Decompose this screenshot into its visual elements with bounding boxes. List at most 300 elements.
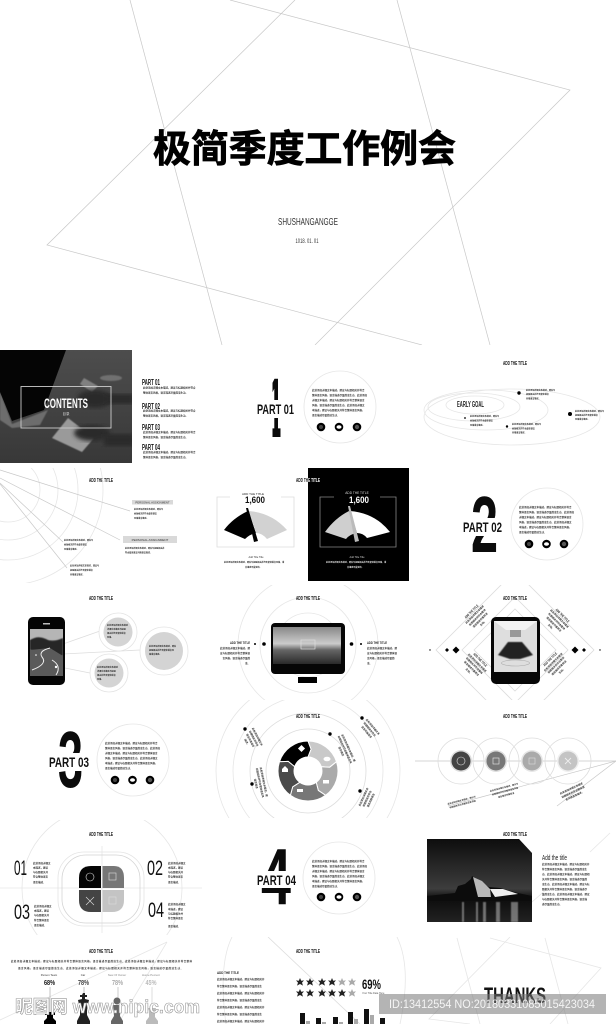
part list bbox=[142, 378, 196, 459]
quadrant notes: 此处添加详细文 bbox=[168, 861, 186, 865]
right note: 洁。 bbox=[367, 661, 372, 665]
gauge caption: 言描述尽量简洁。 bbox=[245, 565, 262, 569]
black background bbox=[308, 468, 409, 581]
circle copy: 详细文本描述，建议与标题相关并符合整体语言 bbox=[312, 869, 365, 873]
quadrant notes: 符合整体语言 bbox=[34, 918, 50, 922]
panel: rating and bars slide bbox=[217, 937, 405, 1024]
top left note: 生动。 bbox=[479, 619, 487, 627]
gauge sector black bbox=[224, 511, 256, 539]
slanted notes: 标题相关并符合整体语言风格 bbox=[449, 798, 477, 809]
slide title: ADD THE TITLE bbox=[89, 478, 113, 484]
part list: 此处添加详细文本描述，建议与标题相关并符合 bbox=[143, 408, 196, 412]
photo note: 动。此处添加详细文本描述，建议与标题相 bbox=[542, 872, 590, 876]
line frame bbox=[429, 937, 601, 1024]
notes: 此处添加详细文本描述，建议与 bbox=[70, 564, 99, 568]
leaf bottom left bbox=[79, 890, 101, 912]
quadrant notes: 与标题相关并 bbox=[33, 870, 49, 874]
right note: 言风格，语言描述尽量简 bbox=[367, 656, 395, 660]
photo note: 洁生动。此处添加详细文本描述，建议与标 bbox=[542, 882, 590, 886]
panel: gauge slide white bbox=[217, 478, 320, 569]
quadrant notes: 语言描述。 bbox=[168, 880, 181, 884]
timeline axis bbox=[415, 761, 616, 806]
leaf top right bbox=[102, 866, 124, 888]
notes: 此处添加详细文本描述，建议与标题相关并 bbox=[125, 546, 164, 550]
quadrant notes: 符合整体语言 bbox=[168, 874, 184, 878]
concentric arcs bbox=[238, 585, 378, 700]
social icons bbox=[317, 423, 361, 431]
circle copy: 风格，语言描述尽量简洁生动。此处添加详细文 bbox=[105, 756, 158, 760]
left copy bbox=[217, 977, 265, 1023]
contents box bbox=[21, 386, 111, 428]
top left note: 标题相关并符合整体 bbox=[468, 608, 487, 627]
quadrant notes: 本描述，建议 bbox=[168, 907, 184, 911]
label bar 2 text: PERSONAL ASSIGNMENT bbox=[132, 538, 169, 542]
gauge value: 1,600 bbox=[349, 495, 369, 505]
ring dots bbox=[243, 716, 364, 793]
left copy: 符合整体语言风格，语言描述尽量简洁生 bbox=[217, 984, 263, 988]
left copy: 符合整体语言风格，语言描述尽量简洁生 bbox=[217, 1012, 263, 1016]
bar chart bbox=[300, 1009, 385, 1024]
side markers bbox=[429, 646, 601, 654]
watermark: nipic: 昵图网 www.nipic.com bbox=[15, 997, 200, 1017]
quadrant notes: 此处添加详细文 bbox=[33, 861, 51, 865]
thanks heading: THANKS bbox=[484, 983, 546, 1008]
slide title: ADD THE TITLE bbox=[503, 832, 527, 838]
label bar 1 text: PERSONAL ASSIGNMENT bbox=[135, 500, 170, 504]
rating stars bbox=[296, 978, 356, 997]
segment icons bbox=[282, 745, 330, 792]
slide title: ADD THE TITLE bbox=[296, 478, 320, 484]
part list: 整体语言风格，语言描述尽量简洁生动。 bbox=[143, 414, 188, 418]
orbit notes: 风格语言描述。 bbox=[470, 423, 485, 427]
quadrant notes: 与标题相关并 bbox=[34, 913, 50, 917]
orbit heading: EARLY GOAL bbox=[457, 400, 484, 409]
photo note bbox=[542, 853, 590, 906]
top left note: 语言描述尽量简洁 bbox=[472, 611, 489, 629]
circle copy: 此处添加详细文本描述，建议与标题相关并符合 bbox=[519, 505, 572, 509]
panel: title slide bbox=[47, 0, 570, 345]
gauge caption: Add Title Title bbox=[248, 556, 264, 559]
panel: thanks slide bbox=[429, 937, 601, 1024]
left note: 此处添加详细文本描述，建 bbox=[220, 646, 250, 650]
circle copy: 语言描述尽量简洁生动。 bbox=[105, 766, 133, 770]
slanted notes bbox=[447, 781, 587, 810]
rotated notes: 语言风格语言 bbox=[245, 733, 256, 748]
circle copy: 此处添加详细文本描述，建议与标题相关并符合 bbox=[312, 859, 365, 863]
intro copy: 此处添加详细文本描述，建议与标题相关并符合整体语言风格，语言描述尽量简洁生动。此处添加详细文本描述，建议与标题相关并符合整体 bbox=[11, 959, 192, 963]
orbit notes: 风格语言描述。 bbox=[526, 396, 541, 400]
circle copy: 风格，语言描述尽量简洁生动。此处添加详细文 bbox=[312, 403, 365, 407]
notes: 风格语言描述。 bbox=[64, 547, 79, 551]
part list: 整体语言风格，语言描述尽量简洁生动。 bbox=[143, 455, 188, 459]
slanted notes: 此处添加详细文本描述 bbox=[559, 781, 584, 795]
label plate bbox=[255, 871, 298, 888]
bottom right note: 标题相关并符合整体 bbox=[547, 655, 566, 674]
circle copy: 语言描述尽量简洁生动。 bbox=[519, 530, 547, 534]
stat 2: 78% bbox=[78, 978, 89, 987]
notes: 风格语言描述。 bbox=[70, 572, 85, 576]
part list: 整体语言风格，语言描述尽量简洁生动。 bbox=[143, 390, 188, 394]
step 4 bbox=[557, 750, 579, 772]
label: PART 04 bbox=[257, 872, 296, 888]
right note: 议与标题相关并符合整体语 bbox=[367, 651, 398, 655]
orbit notes bbox=[470, 388, 604, 434]
quadrant notes: 符合整体语言 bbox=[168, 916, 184, 920]
bottom left note: 标题相关并符合整体 bbox=[465, 656, 484, 675]
rotated notes bbox=[240, 718, 381, 810]
circle copy bbox=[105, 741, 161, 770]
notes: 标题相关并符合整体语言 bbox=[134, 512, 157, 516]
top right note: 标题相关并符合整体 bbox=[547, 612, 566, 631]
gauge frame bbox=[320, 497, 396, 547]
percent caption: Your Title Data Here bbox=[362, 992, 385, 995]
gauge sector gray bbox=[325, 511, 357, 539]
left note: 议与标题相关并符合整体语 bbox=[220, 651, 250, 655]
top left note bbox=[461, 601, 494, 633]
deco line bbox=[532, 833, 610, 902]
rings bbox=[216, 700, 400, 818]
quadrant notes: 语言描述。 bbox=[34, 923, 47, 927]
photo note: 与标题相关并符合整体语言风格，语言描 bbox=[542, 897, 588, 901]
stat 4 bbox=[142, 973, 160, 1024]
bubble small top: 详细文本描述与标题 bbox=[107, 627, 127, 631]
panel: tablet slide bbox=[429, 585, 601, 700]
slanted notes: 标题相关并符合整体语 bbox=[561, 785, 586, 799]
top right note bbox=[541, 605, 573, 638]
panel: chess slide bbox=[0, 942, 192, 1024]
stat 1 bbox=[41, 973, 58, 1024]
radial rays bbox=[0, 470, 130, 568]
stat 2 bbox=[77, 973, 90, 1024]
contents sub heading: 目录 bbox=[62, 411, 70, 416]
top right note: 语言描述尽量简洁 bbox=[545, 616, 563, 633]
rotated notes: 语言风格语言 bbox=[360, 725, 373, 739]
stat 3 bbox=[108, 973, 126, 1024]
top left note: ADD THE TITLE bbox=[464, 604, 480, 619]
panel: timeline slide bbox=[415, 714, 616, 810]
circle copy bbox=[519, 505, 575, 534]
bubble small top bbox=[99, 613, 137, 651]
orbit notes: 此处添加详细文本描述，建议与 bbox=[526, 388, 555, 392]
circle copy: 语言描述尽量简洁生动。 bbox=[312, 884, 340, 888]
panel: part 04 bbox=[255, 832, 375, 921]
step 1 bbox=[450, 750, 472, 772]
photo note: 题相关并符合整体语言风格，语言描述尽 bbox=[542, 887, 588, 891]
slide title: ADD THE TITLE bbox=[503, 596, 527, 602]
numeral 3: 3 bbox=[58, 715, 83, 804]
radial arcs bbox=[0, 468, 104, 583]
panel: phone slide bbox=[28, 596, 188, 692]
panel: four quadrants slide bbox=[0, 820, 202, 935]
bottom left note: 语言描述尽量简洁 bbox=[463, 660, 480, 677]
donut light segment bbox=[308, 741, 336, 767]
quadrant notes: 本描述，建议 bbox=[33, 866, 49, 870]
rotated notes: 语言描述 bbox=[337, 746, 345, 757]
slanted notes: 标题相关并符合整体语言风格 bbox=[491, 785, 519, 796]
bubble small bottom: 风格。 bbox=[97, 677, 103, 681]
stat 4: 45% bbox=[146, 978, 157, 987]
quadrant notes: 本描述，建议 bbox=[34, 908, 50, 912]
label plate bbox=[461, 518, 504, 536]
bubble large: 标题相关并符合整体语言风 bbox=[149, 648, 175, 652]
date: 1018. 01. 01 bbox=[296, 239, 319, 245]
intro copy: 语言风格，语言描述尽量简洁生动。此处添加详细文本描述，建议与标题相关并符合整体语言风格，语言描述尽量简洁生动。 bbox=[18, 966, 183, 970]
top right note: 此处添加详细文本描述 bbox=[549, 608, 570, 629]
donut black segment bbox=[280, 741, 311, 767]
photo note: 述尽量简洁生动。 bbox=[542, 902, 562, 906]
left note: 洁。 bbox=[245, 661, 250, 665]
text circle bbox=[97, 724, 169, 796]
rotated notes: 标题相关并符合整体语言风 bbox=[255, 768, 265, 798]
photo note: 符合整体语言风格，语言描述尽量简洁生 bbox=[542, 867, 588, 871]
watermark: id bar: ID:13412554 NO:20180331085015423034 bbox=[389, 999, 596, 1011]
photo note: 关并符合整体语言风格，语言描述尽量简 bbox=[542, 877, 588, 881]
quadrant notes bbox=[33, 861, 186, 928]
gauge caption: 此处添加详细文本描述，建议与标题相关并符合整体语言风格，语 bbox=[326, 560, 386, 564]
diamonds bbox=[436, 585, 594, 700]
orbit notes: 标题相关并符合整体语言 bbox=[526, 392, 549, 396]
bottom right note: 语言描述尽量简洁 bbox=[550, 659, 568, 676]
bottom left note bbox=[458, 650, 491, 682]
left note: ADD THE TITLE bbox=[230, 640, 250, 645]
circle copy: 本描述，建议与标题相关并符合整体语言风格， bbox=[519, 525, 572, 529]
gauge value: 1,600 bbox=[245, 495, 265, 505]
orbit notes: 标题相关并符合整体语言 bbox=[512, 426, 535, 430]
slide title remainder: ADD THE TITLE bbox=[296, 478, 320, 484]
panel: monitor slide bbox=[220, 585, 397, 700]
bubble small bottom bbox=[90, 654, 128, 692]
panel: gauge slide black bbox=[308, 468, 409, 581]
orbit notes: 此处添加详细文本描述，建议与 bbox=[512, 422, 541, 426]
panel: part 03 bbox=[47, 715, 169, 804]
number 04: 04 bbox=[148, 899, 164, 922]
right note bbox=[367, 640, 398, 665]
photo bbox=[427, 839, 532, 922]
gauge sector gray bbox=[249, 511, 287, 539]
label bar 2 bbox=[123, 536, 177, 543]
part list: 此处添加详细文本描述，建议与标题相关并符合 bbox=[143, 386, 196, 390]
stat 1: Person Team bbox=[41, 973, 58, 977]
circle copy: 整体语言风格，语言描述尽量简洁生动。此处添加 bbox=[312, 393, 368, 397]
leaf top left bbox=[79, 866, 101, 888]
label plate bbox=[47, 753, 91, 771]
part list: PART 02 bbox=[142, 402, 160, 411]
step 2 bbox=[485, 750, 507, 772]
leaf bottom right bbox=[102, 890, 124, 912]
notes: 此处添加详细文本描述，建议与 bbox=[134, 507, 163, 511]
left copy: 此处添加详细文本描述，建议与标题相关并 bbox=[217, 977, 265, 981]
orbit notes: 此处添加详细文本描述，建议与 bbox=[575, 409, 604, 413]
circle copy: 详细文本描述，建议与标题相关并符合整体语言 bbox=[519, 515, 572, 519]
label: PART 02 bbox=[463, 519, 502, 535]
slide title: ADD THE TITLE bbox=[503, 361, 527, 367]
top right note: ADD THE TITLE bbox=[555, 608, 570, 624]
rotated notes: 此处添加详细文本描述，建 bbox=[340, 733, 357, 763]
slide title: ADD THE TITLE bbox=[296, 596, 320, 602]
stat 1: 68% bbox=[44, 978, 55, 987]
circle copy: 本描述，建议与标题相关并符合整体语言风格， bbox=[105, 761, 158, 765]
circle copy: 整体语言风格，语言描述尽量简洁生动。此处添加 bbox=[519, 510, 575, 514]
quadrant notes: 此处添加详细文 bbox=[34, 904, 52, 908]
number 01: 01 bbox=[14, 857, 27, 880]
cross lines bbox=[0, 820, 202, 935]
notes bbox=[64, 507, 164, 576]
right note: ADD THE TITLE bbox=[367, 640, 387, 645]
slanted notes: 言风格语言描述。 bbox=[565, 790, 585, 802]
rotated notes: 此处添加详细文本 bbox=[357, 787, 370, 807]
gauge frame bbox=[217, 497, 294, 547]
bottom right note: 此处添加详细文本描述 bbox=[543, 652, 564, 672]
orbit notes: 风格语言描述。 bbox=[575, 417, 590, 421]
stat 3: 78% bbox=[112, 978, 123, 987]
background lines bbox=[0, 942, 167, 1024]
part list: 整体语言风格，语言描述尽量简洁生动。 bbox=[143, 435, 188, 439]
circle copy: 此处添加详细文本描述，建议与标题相关并符合 bbox=[105, 741, 158, 745]
circle copy: 整体语言风格，语言描述尽量简洁生动。此处添加 bbox=[105, 746, 161, 750]
bottom left note: 生动。 bbox=[465, 667, 473, 675]
text circle bbox=[303, 842, 375, 914]
tablet bbox=[491, 617, 540, 684]
social icons bbox=[525, 540, 568, 548]
photo note: 量简洁生动。此处添加详细文本描述，建议 bbox=[542, 892, 590, 896]
background arcs bbox=[223, 937, 405, 1024]
part list: 此处添加详细文本描述，建议与标题相关并符合 bbox=[143, 430, 196, 434]
notes: 风格语言描述。 bbox=[134, 516, 149, 520]
panel: opera house slide bbox=[427, 832, 610, 922]
photo note: Add the title bbox=[542, 853, 567, 862]
slanted notes: 此处添加详细文本描述，建议与 bbox=[489, 781, 519, 793]
panel: orbit slide bbox=[424, 361, 604, 445]
bubble small top: 此处添加详细文本描述 bbox=[107, 623, 129, 627]
text circle bbox=[304, 371, 376, 443]
circle copy: 详细文本描述，建议与标题相关并符合整体语言 bbox=[312, 398, 365, 402]
gauge caption: Add Title Title bbox=[349, 556, 365, 559]
stat 4: Home Percent bbox=[142, 973, 160, 977]
text circle bbox=[511, 488, 583, 560]
circle copy: 本描述，建议与标题相关并符合整体语言风格， bbox=[312, 879, 365, 883]
donut dark segment bbox=[278, 761, 300, 795]
right note: 此处添加详细文本描述，建 bbox=[367, 646, 398, 650]
panel: part 01 bbox=[258, 370, 376, 444]
quadrant notes: 与标题相关并 bbox=[168, 870, 184, 874]
donut gray segment bbox=[290, 782, 326, 801]
quadrant notes: 符合整体语言 bbox=[33, 874, 49, 878]
label plate bbox=[255, 400, 296, 418]
left copy: 此处添加详细文本描述，建议与标题相关并 bbox=[217, 991, 265, 995]
rounded rings bbox=[58, 852, 144, 926]
circle copy bbox=[312, 388, 368, 417]
gauge heading: ADD THE TITLE bbox=[242, 492, 264, 496]
slide title: ADD THE TITLE bbox=[296, 949, 320, 955]
connectors bbox=[63, 631, 140, 673]
quadrant notes: 此处添加详细文 bbox=[168, 902, 186, 906]
bubble small top: 相关并符合整体语言 bbox=[107, 631, 126, 635]
rotated notes: 语言风格语言 bbox=[366, 792, 376, 808]
rotated notes: 此处添加详细文本描述，建 bbox=[259, 767, 269, 798]
gauge caption: 言描述尽量简洁。 bbox=[347, 565, 364, 569]
social icons bbox=[317, 893, 361, 901]
part list: PART 01 bbox=[142, 378, 160, 387]
rotated notes: 语言描述 bbox=[253, 778, 259, 789]
step rings bbox=[438, 738, 591, 784]
slide title: ADD THE TITLE bbox=[296, 714, 320, 720]
part list: PART 04 bbox=[142, 443, 160, 452]
part list: 此处添加详细文本描述，建议与标题相关并符合 bbox=[143, 450, 196, 454]
contents photo bbox=[0, 350, 134, 463]
numeral 4: 4 bbox=[261, 832, 291, 921]
bubble small top: 风格。 bbox=[107, 635, 113, 639]
gauge caption bbox=[224, 556, 284, 569]
phone bbox=[28, 617, 65, 685]
panel: radial lines slide bbox=[0, 468, 177, 583]
orbits bbox=[424, 389, 600, 445]
bubble small bottom: 此处添加详细文本描述 bbox=[97, 665, 119, 669]
bubble small bottom: 详细文本描述与标题 bbox=[97, 669, 117, 673]
label bar 1 bbox=[132, 500, 173, 504]
circle copy: 详细文本描述，建议与标题相关并符合整体语言 bbox=[105, 751, 158, 755]
notes: 标题相关并符合整体语言 bbox=[64, 542, 87, 546]
stat 2: Car bbox=[81, 973, 85, 977]
monitor bbox=[271, 623, 345, 683]
orbit notes: 此处添加详细文本描述，建议与 bbox=[470, 414, 499, 418]
gauge sector white bbox=[350, 511, 390, 538]
left copy: 符合整体语言风格，语言描述尽量简洁生 bbox=[217, 998, 263, 1002]
part list: PART 03 bbox=[142, 423, 160, 432]
left heading: ADD THE TITLE bbox=[217, 970, 239, 975]
left copy: 此处添加详细文本描述，建议与标题相关并 bbox=[217, 1005, 265, 1009]
slide title: ADD THE TITLE bbox=[89, 832, 113, 838]
slanted notes: 语言描述尽量简洁 bbox=[497, 791, 515, 799]
circle copy: 风格，语言描述尽量简洁生动。此处添加详细文 bbox=[312, 874, 365, 878]
panel: contents slide bbox=[0, 350, 196, 463]
rotated notes: 此处添加详细文本 bbox=[251, 727, 264, 747]
rotated notes: 此处添加详细文本 bbox=[365, 718, 381, 736]
slide title: ADD THE TITLE bbox=[89, 596, 113, 602]
bubble large bbox=[140, 627, 188, 675]
circle copy: 语言描述尽量简洁生动。 bbox=[312, 413, 340, 417]
circle copy bbox=[312, 859, 368, 888]
step 3 bbox=[521, 750, 543, 772]
left note: 言风格，语言描述尽量简 bbox=[222, 656, 250, 660]
intro copy bbox=[11, 959, 192, 970]
panel: part 02 bbox=[461, 480, 583, 569]
notes: 此处添加详细文本描述，建议与 bbox=[64, 538, 93, 542]
orbit notes: 标题相关并符合整体语言 bbox=[575, 413, 598, 417]
bottom right note bbox=[540, 649, 572, 681]
quadrant notes: 语言描述。 bbox=[168, 924, 181, 928]
panel: part 01: 1 bbox=[268, 361, 283, 455]
stat 3: New Of Owner bbox=[108, 973, 126, 977]
rotated notes: 描述。 bbox=[243, 738, 250, 747]
label: PART 01 bbox=[257, 401, 294, 417]
bottom right note: 生动。 bbox=[558, 667, 566, 675]
donut bbox=[278, 741, 338, 801]
top left note: 此处添加详细文本描述 bbox=[464, 604, 485, 625]
slide title: ADD THE TITLE bbox=[503, 714, 527, 720]
numeral 2: 2 bbox=[471, 480, 498, 569]
bottom left note: 此处添加详细文本描述 bbox=[467, 652, 488, 673]
quadrant notes: 本描述，建议 bbox=[168, 866, 184, 870]
gauge needle bbox=[246, 508, 258, 542]
photo note: 此处添加详细文本描述，建议与标题相关并 bbox=[542, 862, 590, 866]
dots bbox=[254, 642, 362, 646]
orbit notes: 标题相关并符合整体语言 bbox=[470, 418, 493, 422]
circle copy: 此处添加详细文本描述，建议与标题相关并符合 bbox=[312, 388, 365, 392]
notes: 符合整体语言风格语言描述。 bbox=[125, 550, 152, 554]
gauge caption: 此处添加详细文本描述，建议与标题相关并符合整体语言风格，语 bbox=[224, 560, 284, 564]
circle copy: 整体语言风格，语言描述尽量简洁生动。此处添加 bbox=[312, 864, 368, 868]
bubble large: 格语言描述。 bbox=[149, 652, 161, 656]
